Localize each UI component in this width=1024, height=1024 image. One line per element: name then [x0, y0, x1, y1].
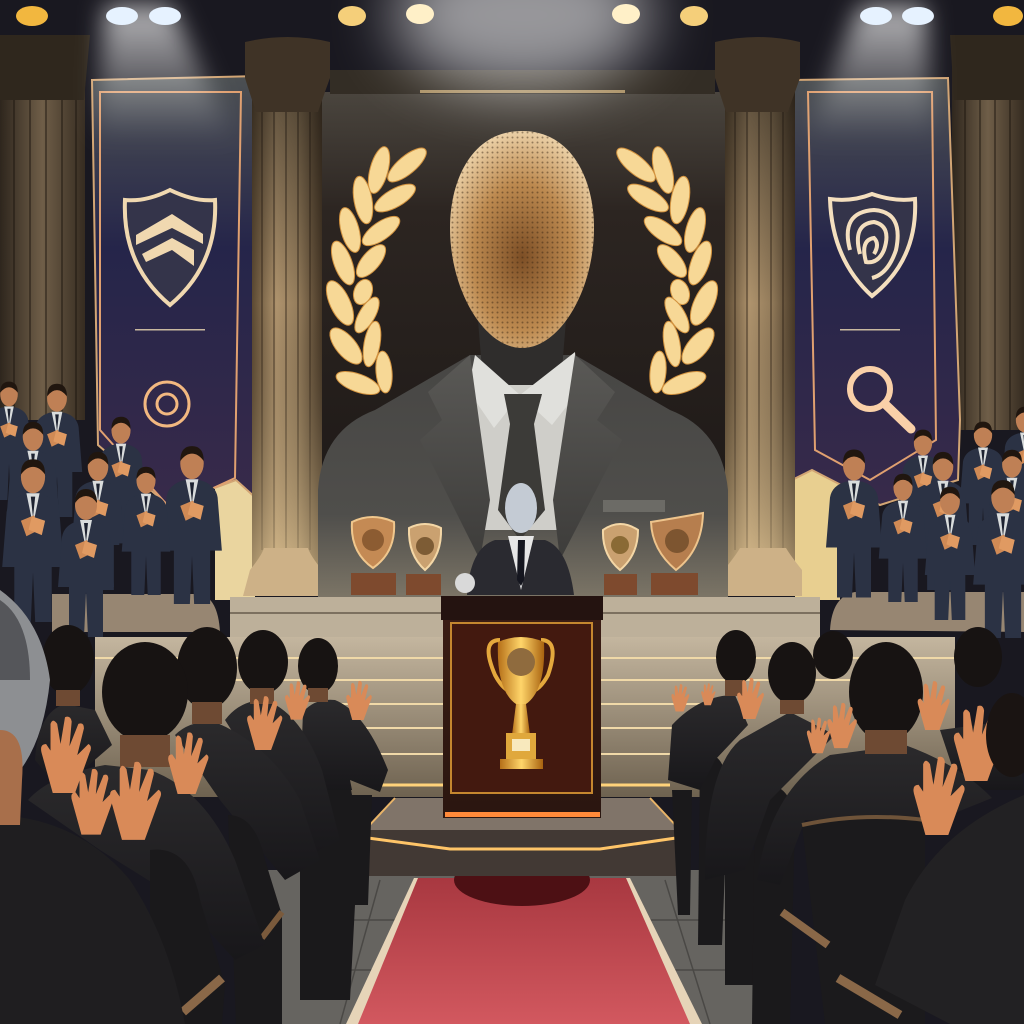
inner left column — [243, 37, 330, 596]
person 2 — [28, 642, 265, 960]
person a — [668, 630, 756, 790]
shirt — [470, 385, 578, 530]
round platform — [365, 798, 680, 876]
right lapel — [553, 355, 622, 560]
floor — [260, 870, 790, 1024]
jacket — [318, 355, 728, 600]
outer right column — [950, 35, 1024, 430]
icon: magnifier — [850, 369, 911, 429]
red carpet — [346, 854, 702, 1024]
laurel left — [321, 143, 431, 399]
neck — [478, 320, 566, 395]
gold trophy — [489, 637, 553, 769]
icon: chevron shield — [125, 190, 215, 305]
mesh mask head — [450, 131, 594, 348]
outer left column — [0, 35, 90, 420]
foreground person right — [838, 693, 1024, 1024]
standing audience left — [0, 382, 222, 637]
person 5 — [298, 638, 388, 792]
stage steps — [95, 597, 955, 797]
person c back — [813, 631, 853, 679]
foreground person left — [0, 590, 185, 1024]
seated audience left — [28, 625, 388, 1024]
person 3 — [175, 627, 320, 880]
right banner — [790, 78, 960, 505]
person b — [705, 642, 835, 880]
chair row 1 — [150, 850, 225, 1024]
large suited figure — [318, 320, 728, 600]
icon: target emblem — [145, 382, 189, 426]
central backdrop — [318, 70, 726, 492]
inner right column — [715, 37, 802, 596]
person e — [940, 627, 1024, 790]
trophy 2 — [406, 524, 441, 595]
person 1 back — [35, 625, 112, 790]
left banner — [92, 76, 258, 508]
standing audience right — [826, 407, 1024, 638]
back row chair — [300, 755, 372, 1000]
warm backlight behind columns — [215, 440, 840, 600]
trophy 4 — [651, 513, 703, 595]
seated audience right — [668, 627, 1024, 1024]
clapping hands — [41, 681, 372, 840]
person d — [757, 642, 992, 885]
side stage rails — [52, 592, 1024, 632]
front chair — [782, 817, 925, 1024]
clapping hands — [671, 678, 1003, 835]
back chairs — [672, 754, 795, 1024]
left lapel — [420, 355, 490, 560]
icon: fingerprint shield — [830, 194, 915, 296]
small trophies — [351, 513, 703, 595]
collar — [468, 352, 578, 428]
soft light glow overlays — [95, 0, 935, 140]
person 4 — [225, 630, 340, 860]
stage lights — [16, 4, 1023, 26]
trophy 3 — [603, 524, 638, 595]
podium — [441, 596, 603, 818]
trophy 1 — [351, 517, 396, 595]
small speaker — [455, 483, 574, 595]
laurel right — [612, 143, 723, 399]
tie — [498, 394, 545, 540]
chair row 2 — [228, 815, 282, 1024]
